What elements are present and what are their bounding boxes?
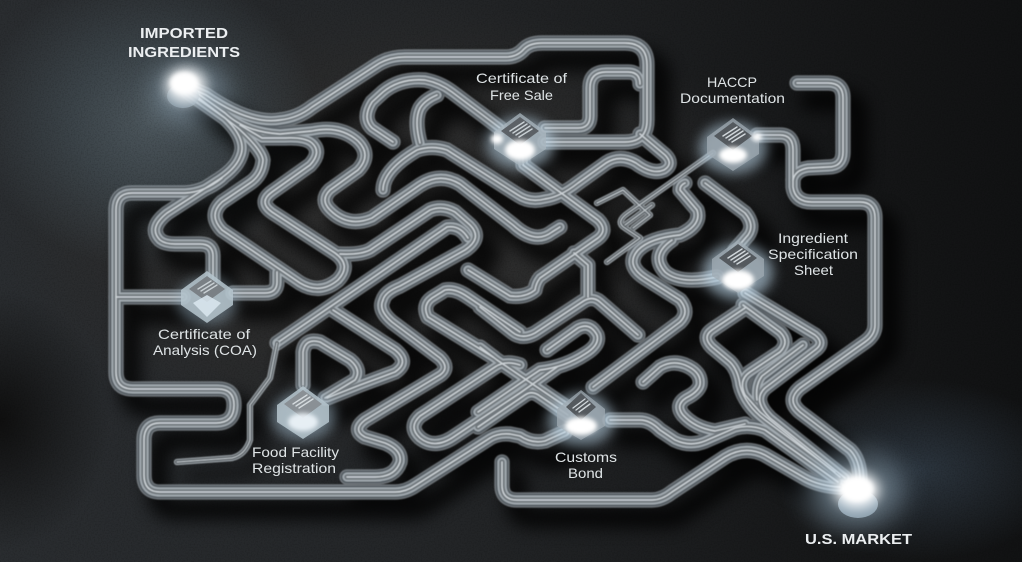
label: Customs Bond bbox=[555, 449, 617, 481]
label: HACCP Documentation bbox=[680, 74, 785, 106]
label: HACCP Documentation: Documentation bbox=[680, 90, 785, 106]
label: Customs Bond: Bond bbox=[568, 465, 603, 481]
document chip: Food Facility Registration bbox=[271, 386, 335, 441]
document chip: Customs Bond bbox=[548, 390, 614, 446]
document chip: HACCP Documentation bbox=[699, 118, 767, 174]
label: Imported Ingredients bbox=[128, 25, 240, 61]
label: Certificate of Analysis (COA): Analysis (COA) bbox=[153, 342, 257, 358]
start node: imported ingredients bbox=[154, 64, 226, 120]
document chip: Certificate of Free Sale bbox=[486, 113, 554, 169]
label: Ingredient Specification Sheet bbox=[768, 230, 858, 278]
label: Certificate of Analysis (COA) bbox=[153, 326, 257, 358]
label: Food Facility Registration bbox=[252, 444, 339, 476]
label: Certificate of Free Sale: Certificate of bbox=[476, 70, 567, 86]
label: Customs Bond: Customs bbox=[555, 449, 617, 465]
label: Imported Ingredients: INGREDIENTS bbox=[128, 44, 240, 61]
label: Food Facility Registration: Registration bbox=[252, 460, 336, 476]
label: Ingredient Specification Sheet: Sheet bbox=[794, 262, 833, 278]
label: Ingredient Specification Sheet: Ingredient bbox=[778, 230, 848, 246]
label: Certificate of Free Sale: Free Sale bbox=[490, 87, 553, 103]
label: U.S. Market: U.S. MARKET bbox=[805, 531, 912, 548]
document chip: Certificate of Analysis bbox=[177, 271, 237, 325]
label: Certificate of Analysis (COA): Certificate of bbox=[158, 326, 250, 342]
glass tube network bbox=[116, 43, 875, 500]
end node: U.S. market bbox=[809, 454, 901, 526]
tube shadows bbox=[130, 60, 889, 517]
label: HACCP Documentation: HACCP bbox=[707, 74, 757, 90]
label: Ingredient Specification Sheet: Specification bbox=[768, 246, 858, 262]
label: Certificate of Free Sale bbox=[476, 70, 567, 103]
document chip: Ingredient Specification Sheet bbox=[703, 240, 773, 300]
label: Imported Ingredients: IMPORTED bbox=[140, 25, 228, 42]
label: Food Facility Registration: Food Facility bbox=[252, 444, 339, 460]
